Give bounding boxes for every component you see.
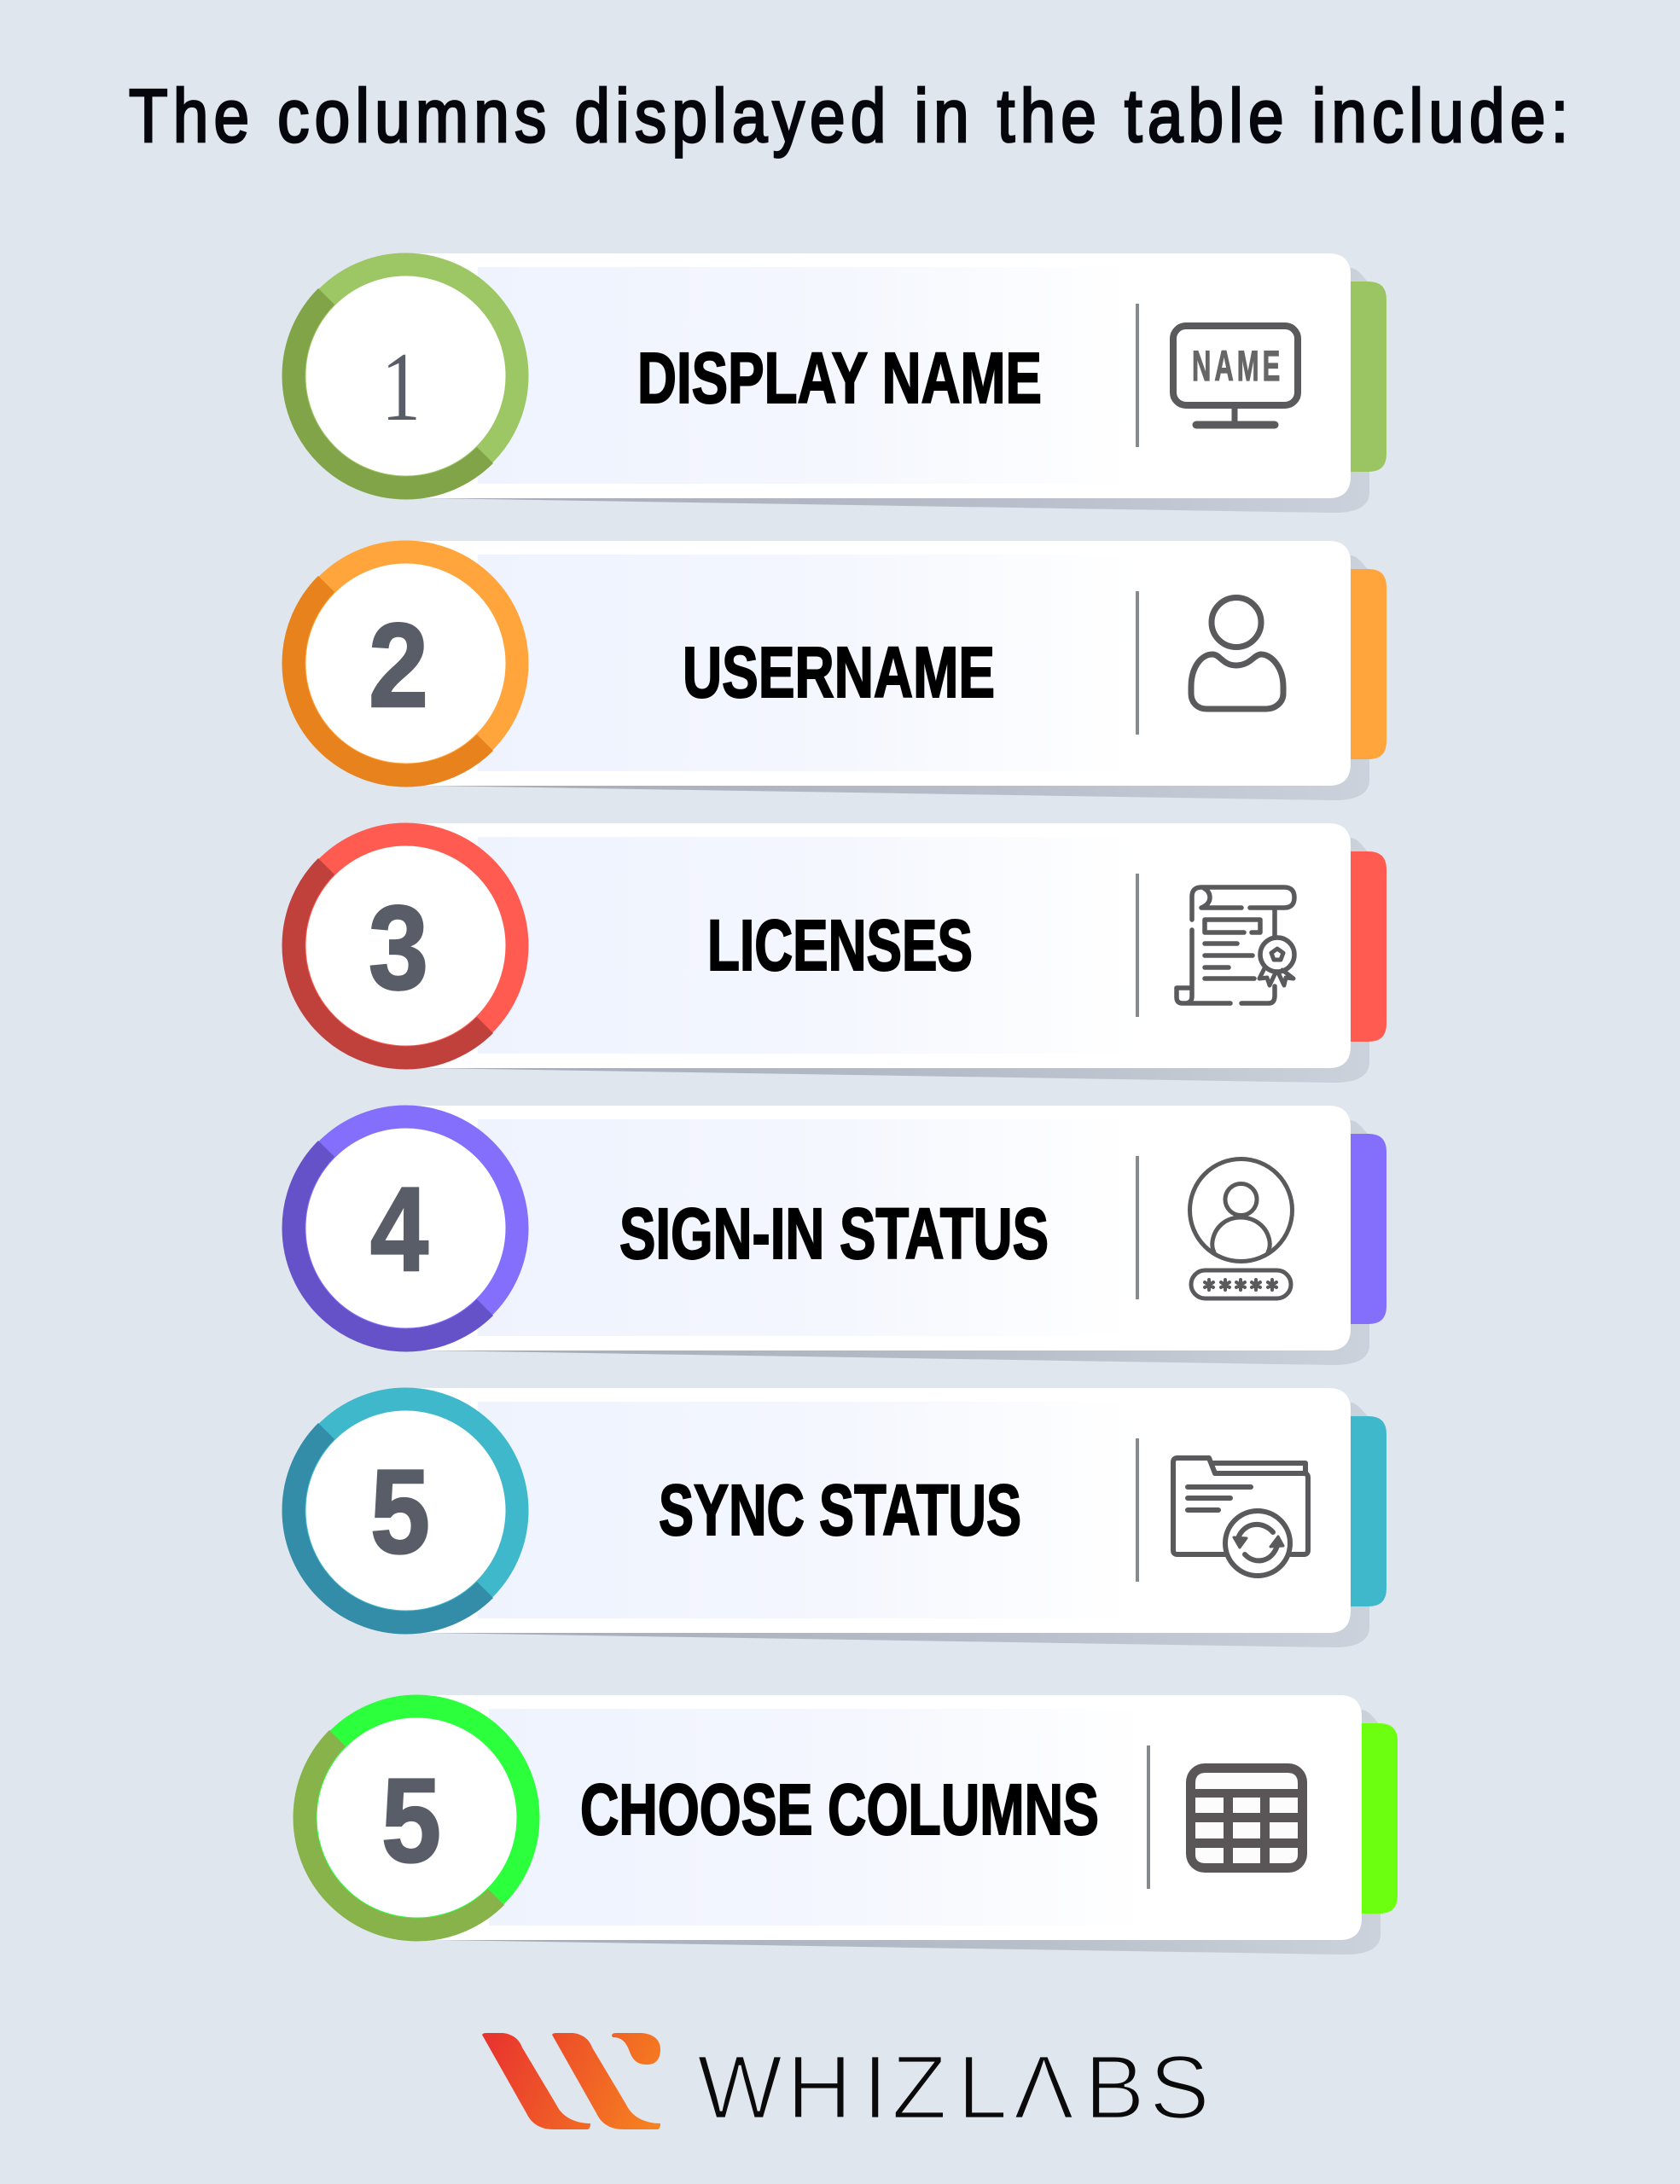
number ring 2 bbox=[294, 552, 517, 775]
number ring 4 bbox=[294, 1117, 517, 1340]
row 4: sign-in status bbox=[294, 1106, 1386, 1365]
row 5: sync status bbox=[294, 1388, 1386, 1647]
row 3: licenses bbox=[294, 823, 1386, 1083]
number 5: 5 bbox=[370, 1444, 430, 1578]
number ring 1 bbox=[294, 264, 517, 488]
logo mark bbox=[482, 2033, 660, 2129]
label: choose columns: CHOOSE COLUMNS bbox=[580, 1769, 1099, 1850]
number 2: 2 bbox=[369, 598, 428, 732]
number 5 (second): 5 bbox=[381, 1753, 441, 1887]
label: username: USERNAME bbox=[683, 632, 995, 712]
icon: certificate bbox=[1177, 887, 1294, 1003]
number 4: 4 bbox=[370, 1162, 428, 1296]
icon: table bbox=[1186, 1763, 1307, 1873]
label: sign-in status: SIGN-IN STATUS bbox=[619, 1194, 1049, 1274]
card 5 bbox=[406, 1388, 1386, 1647]
card 6 bbox=[417, 1695, 1398, 1955]
title: The columns displayed in the table include: bbox=[129, 74, 1573, 158]
label: display name: DISPLAY NAME bbox=[637, 338, 1042, 418]
card 4 bbox=[406, 1106, 1386, 1365]
card 1 bbox=[406, 253, 1386, 513]
label: sync status: SYNC STATUS bbox=[659, 1470, 1021, 1550]
number ring 5 bbox=[294, 1399, 517, 1623]
number ring 3 bbox=[294, 834, 517, 1058]
number ring 6 bbox=[305, 1706, 528, 1930]
icon: name monitor: NAME bbox=[1192, 341, 1283, 390]
label: licenses: LICENSES bbox=[707, 905, 973, 985]
icon: user password bbox=[1189, 1159, 1292, 1298]
row 6: choose columns bbox=[305, 1695, 1398, 1955]
whizlabs logo bbox=[482, 2033, 1210, 2138]
icon: user bbox=[1191, 597, 1283, 709]
number 1: 1 bbox=[381, 333, 421, 442]
logo wordmark: WHIZLΛBS bbox=[697, 2037, 1210, 2138]
icon: folder sync bbox=[1173, 1458, 1308, 1576]
card 3 bbox=[406, 823, 1386, 1083]
icon: name monitor bbox=[1173, 326, 1298, 425]
card 2 bbox=[406, 541, 1386, 800]
number 3: 3 bbox=[369, 880, 428, 1014]
row 2: username bbox=[294, 541, 1386, 800]
row 1: display name bbox=[294, 253, 1386, 513]
